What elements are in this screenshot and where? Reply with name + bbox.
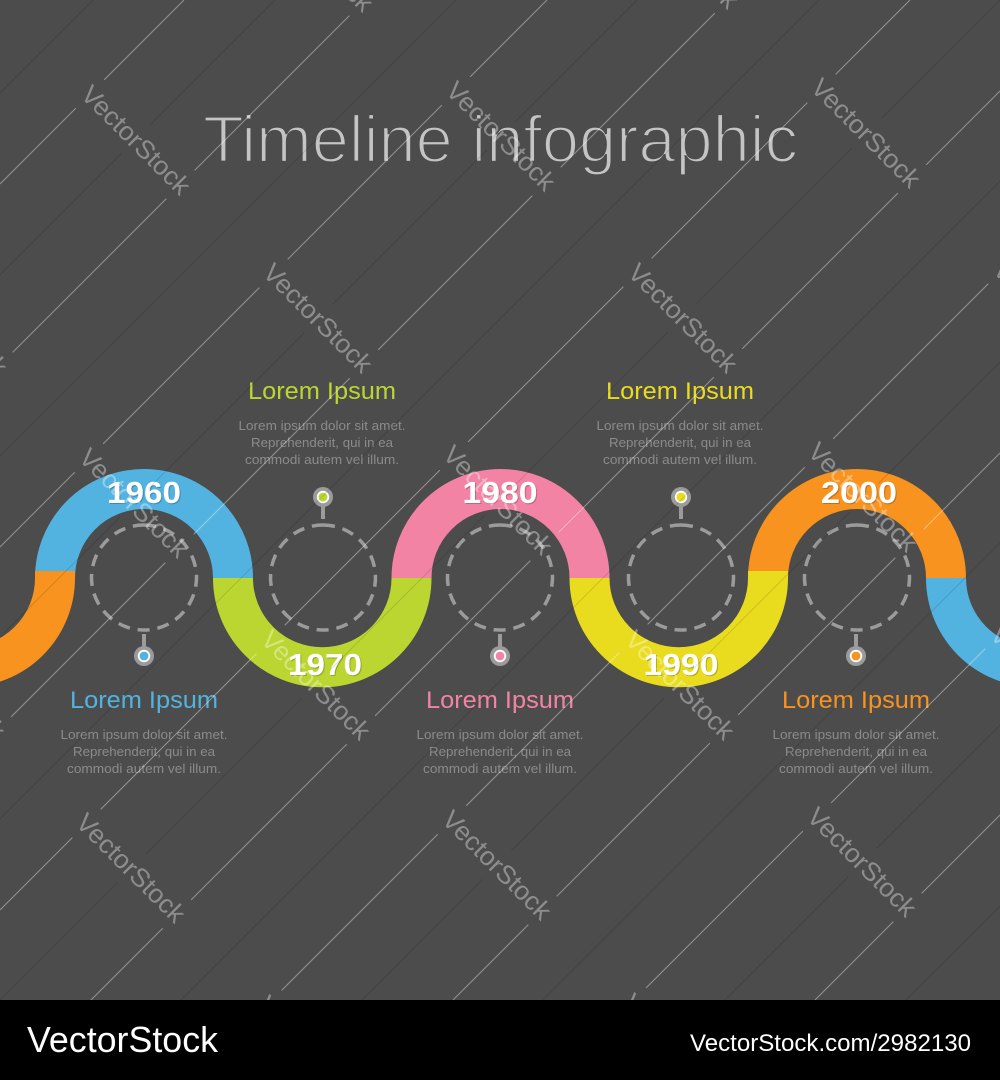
ribbon segment: blue right edge [946,578,1000,667]
pin 2000 [846,634,866,666]
text block 2000: Lorem ipsum dolor sit amet. [772,727,940,742]
pin 1970 [313,487,333,519]
watermark pattern: VectorStock [73,442,196,565]
year 1970: 1970 [288,647,362,682]
ribbon segment: orange left edge [0,571,55,667]
text block 1980: Lorem ipsum dolor sit amet. [416,727,584,742]
dashed circle 2000 [804,525,909,630]
text block 2000: Reprehenderit, qui in ea [785,744,928,759]
dashed circle 1980 [447,525,552,630]
ribbon segment: 1980 pink [412,489,590,578]
text block 2000 [772,687,940,776]
text block 1960: commodi autem vel illum. [67,761,221,776]
ribbon segment: 1990 yellow [590,571,768,667]
dashed circle 1970 [270,525,375,630]
text block 2000: commodi autem vel illum. [779,761,933,776]
text block 1960: Lorem ipsum dolor sit amet. [60,727,228,742]
watermark pattern: VectorStock [619,624,742,747]
text block 1980: commodi autem vel illum. [423,761,577,776]
watermark pattern: VectorStock [70,807,193,930]
text block 1970 [238,378,406,467]
text block 1960: Lorem Ipsum [70,687,218,714]
text block 1970: commodi autem vel illum. [245,452,399,467]
year 1980: 1980 [462,475,538,510]
text block 1990: Reprehenderit, qui in ea [609,435,752,450]
ribbon segment: 1970 green [233,578,412,667]
text block 1990 [596,378,764,467]
text block 1960: Reprehenderit, qui in ea [73,744,216,759]
text block 1980: Lorem Ipsum [426,687,574,714]
year 2000: 2000 [821,475,897,510]
text block 1980 [416,687,584,776]
watermark pattern: VectorStock [805,72,928,195]
pin 1980 [490,634,510,666]
text block 1990: commodi autem vel illum. [603,452,757,467]
text block 1970: Lorem Ipsum [248,378,396,405]
title: Timeline infographic [203,102,798,176]
dashed circle 1960 [91,525,196,630]
watermark pattern: VectorStock [801,801,924,924]
watermark pattern: VectorStock [802,436,925,559]
watermark pattern: VectorStock [255,624,378,747]
text block 1990: Lorem Ipsum [606,378,754,405]
footer logo text: VectorStock [27,1019,219,1060]
footer image id: VectorStock.com/2982130 [690,1030,971,1057]
year 1990: 1990 [644,647,718,682]
wavy timeline ribbon [0,489,1000,667]
watermark pattern: VectorStock [436,804,559,927]
ribbon segment: 2000 orange [768,489,946,578]
text block 1990: Lorem ipsum dolor sit amet. [596,418,764,433]
text block 1970: Reprehenderit, qui in ea [251,435,394,450]
watermark pattern: VectorStock [622,257,745,380]
pin 1990 [671,487,691,519]
dashed circle 1990 [628,525,733,630]
text block 2000: Lorem Ipsum [782,687,930,714]
watermark pattern: VectorStock [440,75,563,198]
text block 1970: Lorem ipsum dolor sit amet. [238,418,406,433]
watermark pattern: Ve [617,987,660,1030]
year 1960: 1960 [107,475,181,510]
ribbon segment: 1960 blue [55,489,233,578]
pin 1960 [134,634,154,666]
text block 1980: Reprehenderit, qui in ea [429,744,572,759]
watermark pattern: VectorStock [437,439,560,562]
watermark pattern: Ve [252,989,295,1032]
watermark pattern: VectorStock [75,79,198,202]
footer bar [0,1000,1000,1080]
watermark pattern: VectorStock [257,257,380,380]
text block 1960 [60,687,228,776]
